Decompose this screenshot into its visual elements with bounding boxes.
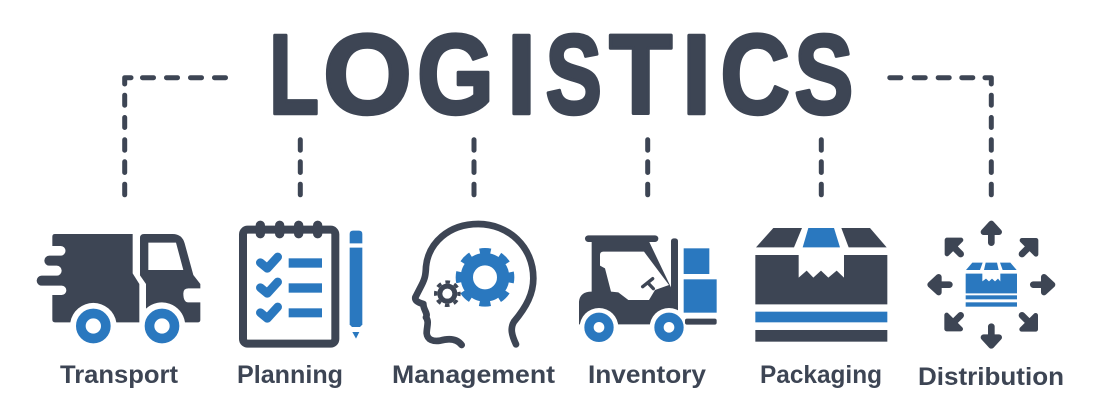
- connector: inventory: [645, 140, 650, 195]
- title: S: [546, 12, 602, 138]
- title: O: [323, 12, 412, 138]
- label: Packaging: Packaging: [760, 361, 882, 389]
- icon: forklift: [579, 235, 717, 347]
- title: C: [720, 12, 790, 138]
- connector: packaging: [819, 140, 824, 195]
- label: Planning: Planning: [237, 361, 343, 389]
- title: I: [507, 12, 536, 138]
- icon: planning notepad: [243, 225, 362, 344]
- connector: right dashed line: [890, 78, 991, 195]
- icon: head with gears: [415, 224, 533, 345]
- title: I: [682, 12, 711, 138]
- title: S: [794, 12, 853, 138]
- title: G: [417, 12, 494, 138]
- connector: planning: [298, 140, 303, 195]
- title: T: [609, 12, 672, 138]
- label: Distribution: Distribution: [918, 363, 1064, 391]
- icon: packaging box: [755, 228, 887, 342]
- label: Transport: Transport: [60, 361, 179, 389]
- title: L: [269, 12, 319, 138]
- icon: delivery truck: [37, 234, 200, 338]
- icon: distribution box with arrows: [930, 224, 1052, 346]
- label: Inventory: Inventory: [588, 361, 706, 389]
- label: Management: Management: [392, 361, 556, 389]
- connector: management: [472, 140, 476, 195]
- connector: left dashed line: [125, 78, 226, 195]
